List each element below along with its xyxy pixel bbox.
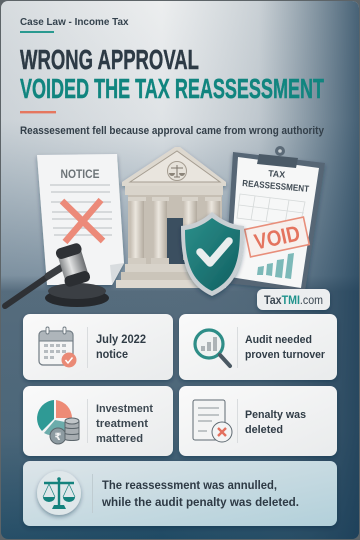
header category label: Case Law - Income Tax <box>20 17 129 28</box>
icon: scales of justice <box>37 471 81 515</box>
icon: pie chart with coins <box>37 400 79 444</box>
panel: July 2022 notice: July 2022 <box>96 333 146 346</box>
icon: magnifier with bars <box>195 330 230 366</box>
icon: gavel <box>5 242 109 307</box>
title: WRONG APPROVAL <box>20 44 199 75</box>
panel: penalty was deleted: Penalty was <box>245 409 306 421</box>
bar chart: teal bars <box>257 253 294 279</box>
illustration: tax reassessment clipboard: TAX <box>268 168 286 180</box>
illustration: tax reassessment clipboard: REASSESSMENT <box>242 178 310 194</box>
panel: penalty was deleted <box>179 386 337 456</box>
panel: July 2022 notice: notice <box>96 348 129 361</box>
title <box>20 44 324 104</box>
icon: pie chart with coins: ₹ <box>55 432 62 443</box>
panel: penalty was deleted: deleted <box>245 424 283 436</box>
accent rule <box>20 111 56 113</box>
subtitle: Reassesement fell because approval came from wrong authority <box>20 125 324 137</box>
illustration: notice document: NOTICE <box>60 169 100 181</box>
icon: calendar <box>39 327 76 368</box>
panel: investment treatment mattered: mattered <box>96 433 143 445</box>
panel: investment treatment mattered: treatment <box>96 418 148 430</box>
panel: investment treatment mattered: Investment <box>96 403 153 415</box>
panel: conclusion: The reassessment was annulled, <box>102 478 277 492</box>
panel: audit needed proven turnover: proven turnover <box>245 349 326 361</box>
icon: shield with check <box>181 212 244 296</box>
icon: red cross <box>62 200 103 242</box>
icon: document with red x <box>193 400 232 442</box>
illustration: tax reassessment clipboard <box>225 146 325 291</box>
brand badge: TaxTMI.com <box>264 295 323 307</box>
illustration: courthouse <box>116 147 226 288</box>
panel: investment treatment mattered <box>23 386 173 456</box>
panel: conclusion: while the audit penalty was deleted. <box>101 495 299 509</box>
header category label <box>20 17 129 33</box>
panel: conclusion <box>23 461 337 526</box>
brand badge <box>257 289 330 310</box>
panel: audit needed proven turnover: Audit needed <box>245 334 312 346</box>
stamp: void: VOID <box>252 220 302 254</box>
panel: audit needed proven turnover <box>179 314 337 380</box>
illustration: notice document <box>37 154 124 285</box>
panel: July 2022 notice <box>23 314 173 380</box>
